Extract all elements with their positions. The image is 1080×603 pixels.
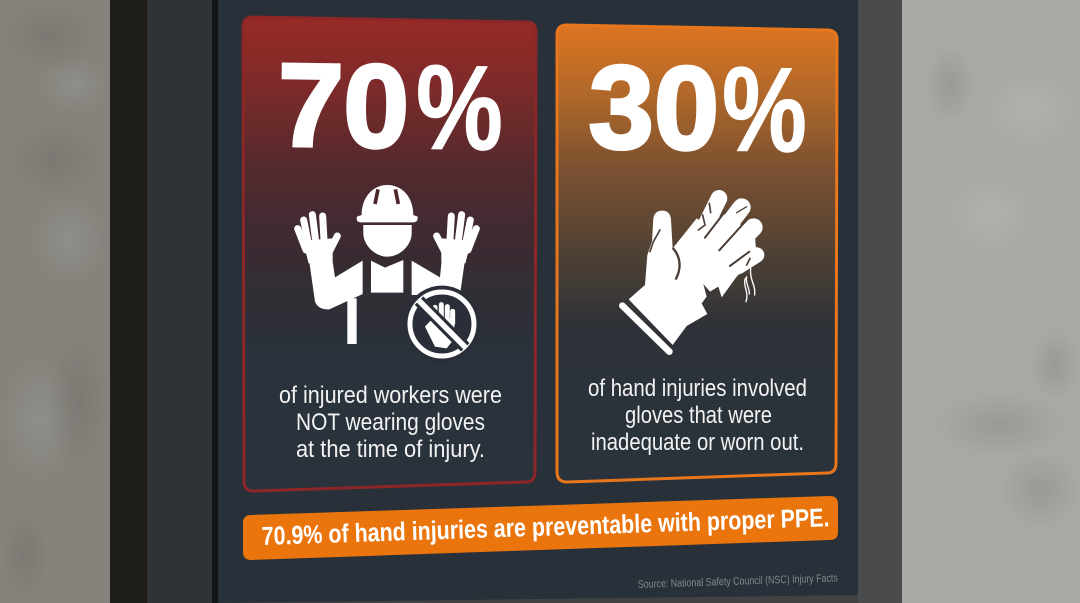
callout text: 70.9% of hand injuries are preventable with proper PPE.: [261, 502, 830, 551]
sign frame: [110, 0, 902, 603]
icon: torn glove: [622, 198, 757, 352]
stat: 30%: %: [721, 42, 808, 177]
dark poster board: [218, 0, 858, 603]
source note: Source: National Safety Council (NSC) Injury Facts: [638, 572, 838, 591]
caption: 70 percent: NOT wearing gloves: [296, 409, 485, 436]
orange card: [557, 25, 837, 482]
stat: 70%: %: [415, 40, 504, 176]
caption: 30 percent: [588, 375, 807, 456]
caption: 70 percent: at the time of injury.: [296, 436, 485, 463]
stat: 30%: 30: [588, 41, 720, 175]
red card: [243, 17, 536, 491]
caption: 30 percent: gloves that were: [625, 402, 772, 429]
caption: 70 percent: of injured workers were: [279, 382, 502, 409]
stat: 70%: 70: [277, 39, 410, 173]
caption: 30 percent: of hand injuries involved: [588, 375, 807, 402]
caption: 70 percent: [279, 382, 502, 463]
panel: 70 percent: [243, 17, 536, 491]
stat: 30%: [588, 40, 808, 177]
icon: worker with no gloves: [298, 185, 480, 362]
stat: 70%: [277, 38, 504, 176]
caption: 30 percent: inadequate or worn out.: [591, 429, 804, 456]
callout bar: [243, 496, 838, 560]
panel: 30 percent: [557, 25, 837, 482]
